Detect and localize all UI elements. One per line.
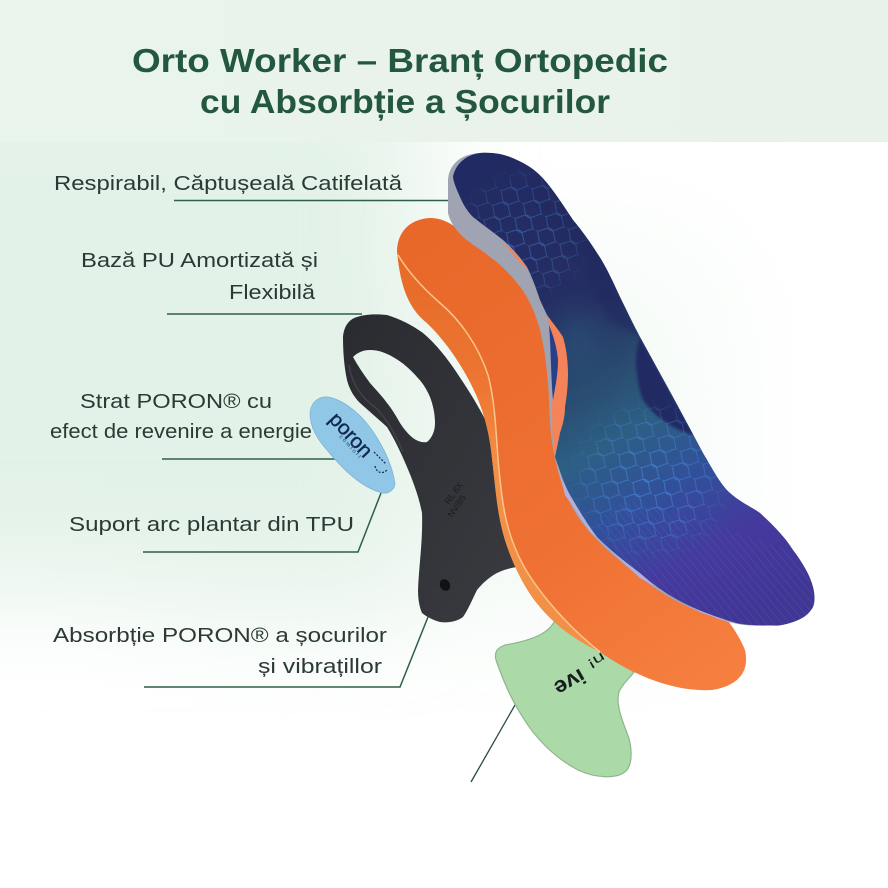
label: shock absorption	[53, 617, 428, 687]
wave texture	[467, 170, 588, 295]
arch cutout	[547, 315, 568, 455]
title: cu Absorbție a Șocurilor	[200, 83, 610, 121]
label: PU base: Bază PU Amortizată și	[81, 249, 318, 272]
insole side edge	[448, 153, 814, 626]
label: shock absorption: Absorbție PORON® a șocurilor	[53, 624, 387, 647]
poron heel pad: comfort	[338, 434, 363, 461]
title: Orto Worker – Branț Ortopedic	[132, 42, 668, 80]
dark navy patch	[636, 337, 695, 436]
label: PU base	[81, 249, 362, 314]
leader line: green pad	[471, 705, 515, 782]
blue top layer insole	[448, 152, 814, 626]
label: TPU arch support	[69, 493, 381, 552]
label: PORON layer: Strat PORON® cu	[80, 390, 272, 413]
green forefoot pad	[495, 620, 634, 777]
poron heel pad: poron	[324, 408, 377, 462]
title	[132, 42, 668, 121]
label: PORON layer	[50, 390, 336, 459]
green forefoot pad: n!	[585, 649, 608, 672]
label: TPU arch support: Suport arc plantar din TPU	[69, 513, 354, 536]
label: breathable lining: Respirabil, Căptușeală Catifelată	[54, 172, 403, 195]
green forefoot pad: ive	[550, 664, 590, 701]
poron heel pad	[310, 397, 395, 493]
orange cushion layer	[397, 218, 746, 690]
orange side wall	[397, 250, 600, 652]
black arch support	[343, 314, 517, 622]
insole top surface	[453, 152, 814, 626]
black arch support: NV/85	[445, 493, 468, 519]
label: PORON layer: efect de revenire a energie	[50, 421, 312, 443]
stripe texture	[590, 500, 815, 625]
label: shock absorption: și vibrațillor	[258, 655, 382, 678]
black arch support: RL 8X	[442, 480, 465, 506]
label: PU base: Flexibilă	[229, 281, 316, 304]
